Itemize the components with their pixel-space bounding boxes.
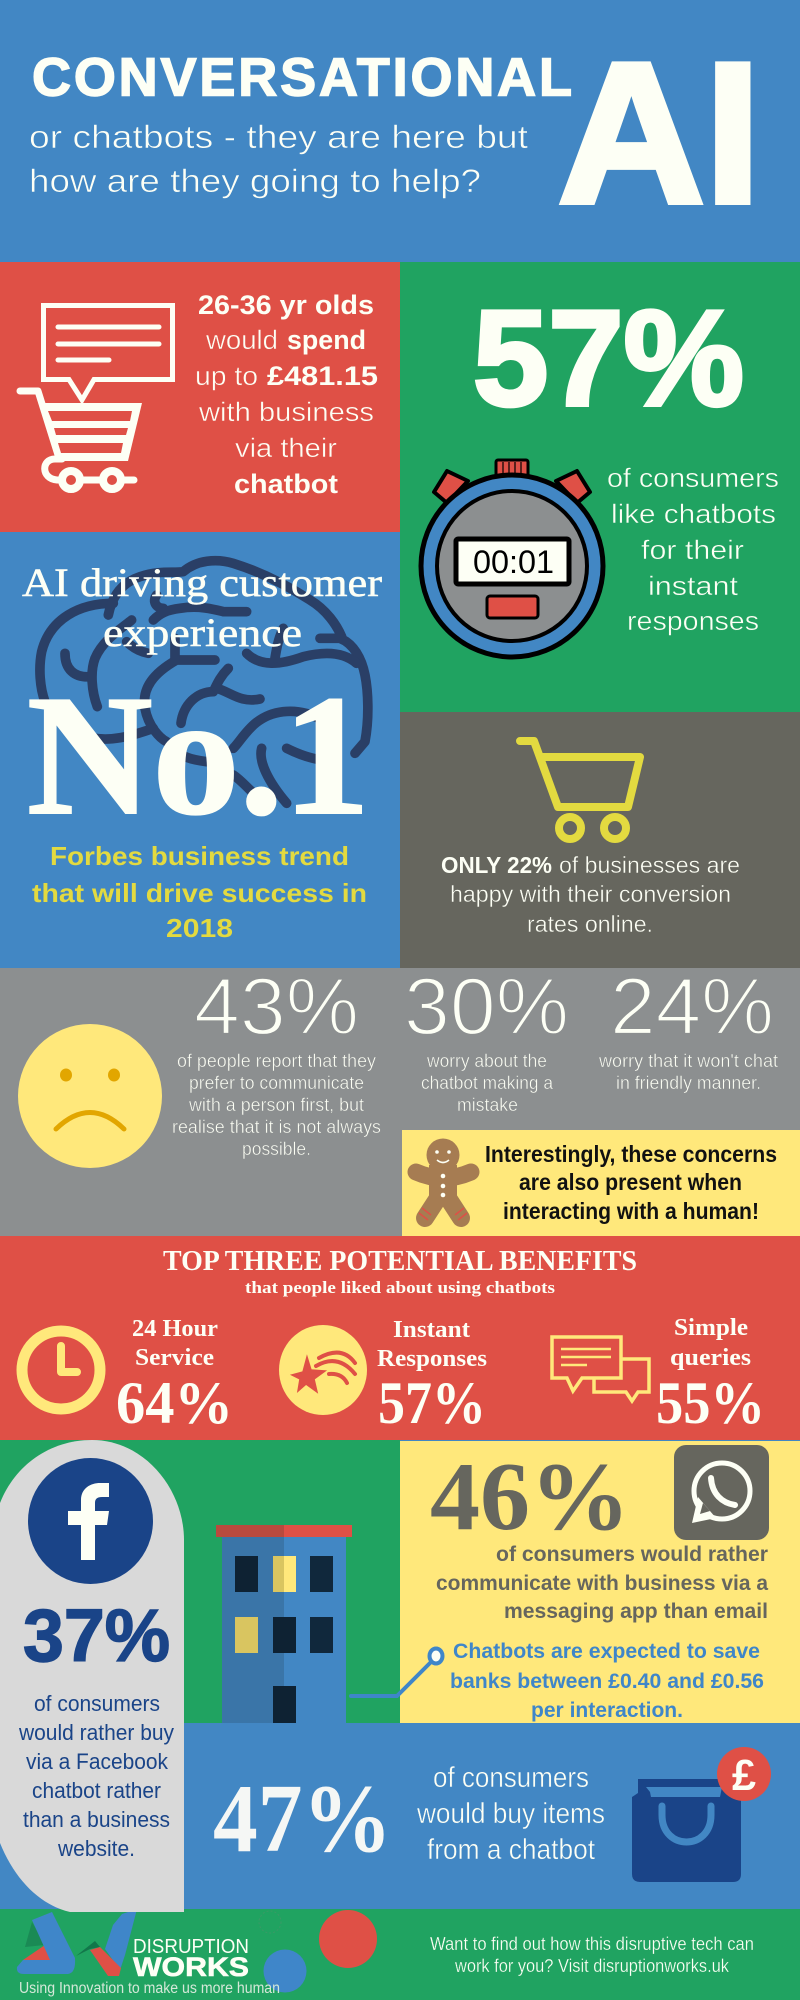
messaging text: communicate with business via a: [436, 1572, 768, 1595]
benefit: simple queries: Simple: [674, 1315, 748, 1341]
stat: 43 percent: possible.: [242, 1139, 311, 1159]
stat: 30 percent: chatbot making a: [421, 1073, 554, 1093]
panel: green building: [0, 1440, 400, 1723]
Forbes trend caption: 2018: [166, 913, 233, 943]
panel: buy from chatbot: [0, 1723, 800, 1909]
buy items text: would buy items: [416, 1798, 605, 1830]
spend statistic text: [195, 290, 378, 499]
spend statistic text: would: [205, 325, 278, 355]
callout text: interacting with a human!: [503, 1198, 759, 1224]
buy items text: [416, 1762, 605, 1866]
callout: human concerns: [402, 1130, 800, 1236]
stat: 24 percent: worry that it won't chat: [598, 1051, 778, 1071]
facebook text: website.: [57, 1836, 135, 1861]
icon: brain: [40, 561, 368, 803]
call to action: [430, 1934, 754, 1976]
panel: facebook pill: [0, 1440, 184, 1912]
panel: header: [0, 0, 800, 262]
spend statistic text: £481.15: [267, 361, 378, 391]
bank savings text: Chatbots are expected to save: [453, 1640, 760, 1663]
stat: 43 percent: prefer to communicate: [189, 1073, 364, 1093]
spend statistic text: via their: [235, 433, 337, 463]
37 percent figure: 37%: [23, 1594, 170, 1677]
facebook text: than a business: [23, 1807, 170, 1832]
bank savings text: [450, 1640, 764, 1722]
messaging text: messaging app than email: [504, 1600, 768, 1623]
callout text: [485, 1141, 777, 1224]
conversion text: happy with their conversion: [450, 881, 731, 907]
spend statistic text: 26-36 yr olds: [198, 290, 374, 320]
instant responses text: for their: [641, 535, 744, 565]
instant responses text: [607, 463, 779, 636]
icon: gingerbread man: [416, 1138, 471, 1220]
instant responses text: responses: [627, 606, 759, 636]
logo: disruption works: [17, 1909, 280, 1997]
subtitle: how are they going to help?: [29, 163, 481, 199]
subheading: that people liked about using chatbots: [245, 1278, 555, 1297]
panel: AI driving customer experience: [0, 532, 400, 968]
facebook text: [18, 1691, 174, 1861]
logo: disruption works: Using Innovation to make us more human: [19, 1980, 280, 1997]
heading: TOP THREE POTENTIAL BENEFITS: [163, 1246, 637, 1277]
Forbes trend caption: Forbes business trend: [50, 841, 349, 871]
benefit: instant responses: [279, 1317, 487, 1436]
facebook text: of consumers: [34, 1691, 160, 1716]
47 percent figure: 47%: [213, 1765, 392, 1873]
messaging text: [436, 1543, 768, 1623]
logo: disruption works: WORKS: [133, 1952, 249, 1982]
57 percent figure: 57%: [473, 282, 744, 434]
decorative circles: [259, 1910, 377, 1992]
stat: 43 percent: of people report that they: [177, 1051, 376, 1071]
facebook text: would rather buy: [18, 1720, 174, 1745]
Forbes trend caption: that will drive success in: [32, 878, 367, 908]
icon: yellow cart: [520, 741, 640, 839]
panel: footer: [0, 1909, 800, 2000]
bank savings text: per interaction.: [531, 1699, 683, 1722]
panel: top three benefits: [0, 1236, 800, 1440]
logo: disruption works: DISRUPTION: [133, 1936, 249, 1958]
spend statistic text: with business: [198, 397, 374, 427]
panel: instant responses: [400, 262, 800, 712]
call to action: Want to find out how this disruptive tech can: [430, 1934, 754, 1954]
stat: 30 percent: mistake: [457, 1095, 518, 1115]
bank savings text: banks between £0.40 and £0.56: [450, 1670, 764, 1693]
icon: shopping bag with pound: £: [732, 1751, 757, 1800]
conversion text: [441, 852, 740, 937]
spend statistic text: chatbot: [234, 469, 338, 499]
benefit: simple queries: [552, 1315, 765, 1436]
AI wordmark: AI: [558, 22, 761, 245]
icon: stopwatch: 00:01: [473, 544, 554, 580]
icon: shopping cart with speech bubble: [20, 306, 172, 489]
stat: 43 percent: realise that it is not always: [172, 1117, 381, 1137]
benefit: 24 hour service: Service: [135, 1345, 214, 1371]
icon: clock: [22, 1331, 100, 1409]
icon: shopping bag with pound: [632, 1747, 771, 1882]
facebook text: chatbot rather: [32, 1778, 161, 1803]
icon: office building: [216, 1525, 352, 1723]
benefit: 24 hour service: 64%: [116, 1370, 233, 1436]
instant responses text: like chatbots: [611, 499, 776, 529]
icon: facebook: [28, 1458, 153, 1584]
heading: [22, 560, 382, 655]
stat: 30 percent: 30%: [404, 962, 569, 1052]
conversion text: rates online.: [527, 911, 653, 937]
benefit: instant responses: Responses: [377, 1346, 487, 1372]
buy items text: of consumers: [433, 1762, 589, 1794]
benefit: 24 hour service: 24 Hour: [132, 1316, 218, 1342]
icon: shooting star: [279, 1325, 367, 1415]
panel: messaging app: [400, 1441, 800, 1723]
messaging text: of consumers would rather: [496, 1543, 768, 1566]
buy items text: from a chatbot: [427, 1834, 595, 1866]
facebook text: via a Facebook: [26, 1749, 169, 1774]
46 percent figure: 46%: [430, 1443, 630, 1551]
icon: sad face: [18, 1024, 162, 1168]
subtitle: [29, 119, 528, 199]
icon: stopwatch: [421, 460, 603, 657]
icon: whatsapp: [674, 1445, 769, 1540]
instant responses text: of consumers: [607, 463, 779, 493]
conversion text: of businesses are: [559, 852, 740, 878]
stat: 24 percent: [598, 962, 778, 1093]
benefit: simple queries: 55%: [656, 1370, 765, 1436]
callout text: Interestingly, these concerns: [485, 1141, 777, 1167]
No.1 figure: No.1: [27, 661, 370, 851]
stat: 30 percent: worry about the: [426, 1051, 547, 1071]
benefit: instant responses: Instant: [393, 1317, 470, 1343]
spend statistic text: spend: [287, 325, 366, 355]
stat: 24 percent: in friendly manner.: [616, 1073, 761, 1093]
arrow: callout connector: [351, 1648, 442, 1696]
stat: 43 percent: 43%: [194, 962, 359, 1052]
stat: 30 percent: [404, 962, 569, 1115]
heading: experience: [103, 610, 302, 655]
subtitle: or chatbots - they are here but: [29, 119, 528, 155]
instant responses text: instant: [648, 571, 739, 601]
conversion text: ONLY 22%: [441, 852, 552, 878]
panel: chatbot spend: [0, 262, 400, 532]
spend statistic text: up to: [195, 361, 258, 391]
stat: 43 percent: [172, 962, 381, 1159]
stat: 24 percent: 24%: [610, 962, 774, 1052]
panel: concerns: [0, 962, 800, 1236]
heading: AI driving customer: [22, 560, 382, 605]
title: CONVERSATIONAL: [32, 48, 572, 108]
panel: conversion rates: [400, 712, 800, 968]
benefit: simple queries: queries: [670, 1345, 751, 1371]
stat: 43 percent: with a person first, but: [188, 1095, 364, 1115]
icon: chat bubbles: [552, 1337, 649, 1401]
Forbes trend caption: [32, 841, 367, 943]
benefit: 24 hour service: [22, 1316, 233, 1436]
call to action: work for you? Visit disruptionworks.uk: [454, 1956, 730, 1976]
benefit: instant responses: 57%: [378, 1370, 486, 1436]
callout text: are also present when: [519, 1169, 742, 1195]
